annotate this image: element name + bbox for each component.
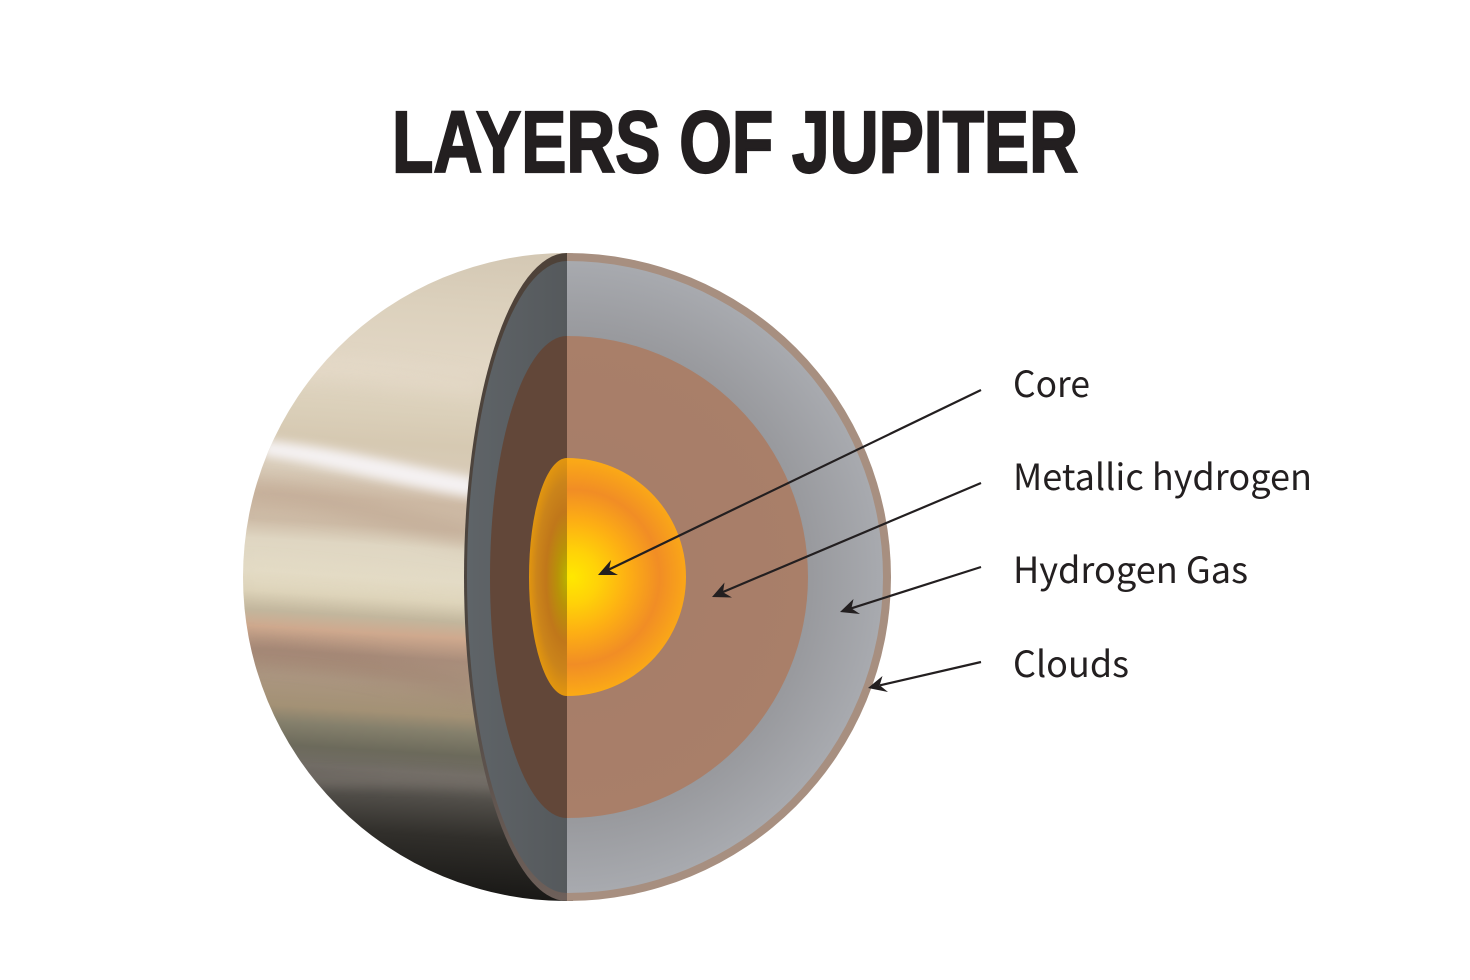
right half: hydrogen gas layer <box>567 261 883 893</box>
left half: shaded cut faces <box>464 253 567 901</box>
outer surface: banded atmosphere <box>243 253 573 901</box>
label: clouds: Clouds <box>1013 636 1129 688</box>
left face: metallic hydrogen <box>490 336 567 818</box>
label: core: Core <box>1013 356 1090 408</box>
left rim: clouds <box>464 253 567 901</box>
left face: core <box>529 458 567 696</box>
right half: clouds layer <box>567 253 891 901</box>
arrow: metallic hydrogen <box>712 483 981 598</box>
left face: hydrogen gas <box>467 261 567 893</box>
label: hydrogen gas: Hydrogen Gas <box>1013 542 1248 594</box>
title: LAYERS OF JUPITER <box>392 94 1078 191</box>
arrow: hydrogen gas <box>840 567 981 614</box>
arrow: clouds <box>868 662 981 692</box>
arrow: core <box>598 390 981 575</box>
right half: metallic hydrogen layer <box>567 336 808 818</box>
diagram: Jupiter cutaway sphere <box>243 253 891 901</box>
label: metallic hydrogen: Metallic hydrogen <box>1013 449 1312 501</box>
right half: core <box>567 458 686 696</box>
